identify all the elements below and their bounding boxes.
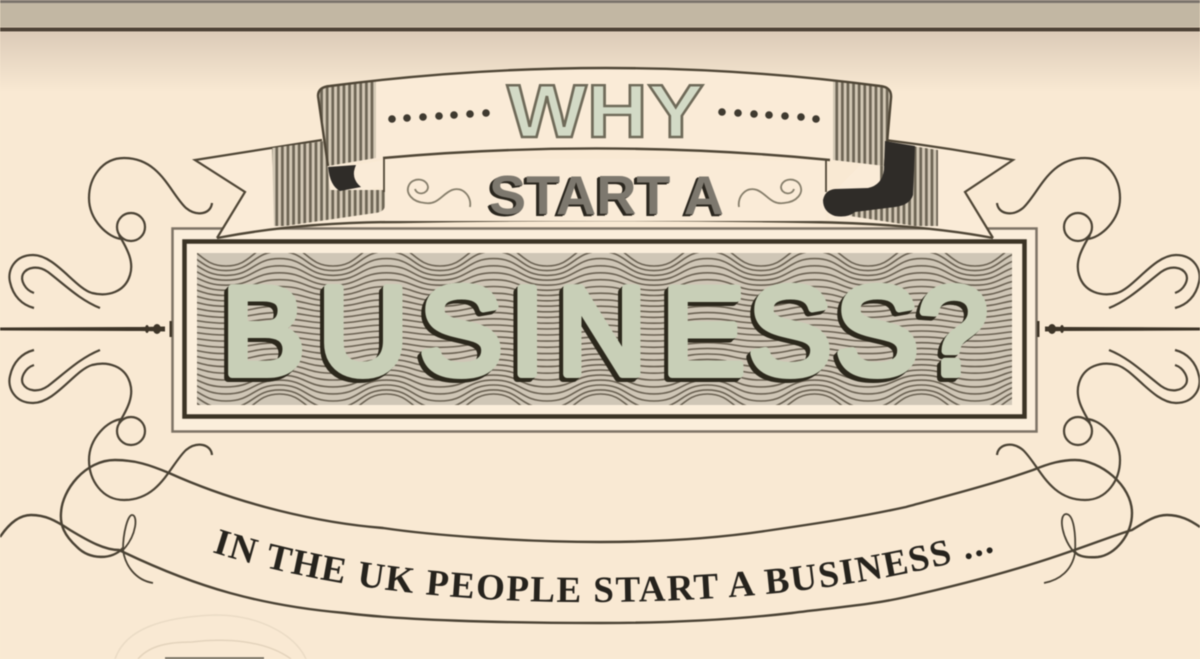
ribbon left tail — [195, 140, 385, 238]
panel: title box with engraved wave fill — [184, 242, 1024, 416]
ribbon: lower curved banner — [0, 460, 1200, 623]
flourish: lower left — [9, 350, 212, 500]
ribbon lower band edge — [217, 220, 993, 238]
icon: right scroll curl — [739, 180, 801, 207]
flourish: upper left — [9, 158, 212, 308]
ribbon upper banner — [318, 68, 891, 221]
banner top edge and end loops — [61, 460, 1132, 557]
dotted rule left — [388, 109, 490, 123]
flourish: upper right — [997, 158, 1200, 308]
centre rule right — [1037, 321, 1200, 337]
dotted rule right — [718, 108, 820, 123]
ribbon: why start a banner — [195, 68, 1013, 238]
icon: left scroll curl — [408, 180, 470, 207]
right small loop — [1044, 514, 1075, 583]
heading: START A: START A — [489, 164, 724, 226]
ribbon right tail — [826, 140, 1013, 238]
left small loop — [123, 515, 153, 583]
panel: outer frame of title box — [172, 228, 1036, 432]
centre rule left — [0, 321, 172, 337]
text: banner caption: IN THE UK PEOPLE START A BUSINESS ... — [212, 528, 994, 604]
heading: WHY: WHY — [507, 69, 704, 153]
heading: BUSINESS?: BUSINESS? — [222, 263, 987, 401]
ribbon left fold — [328, 165, 361, 191]
top band with rule — [0, 0, 1200, 32]
faint emblem at bottom edge — [115, 615, 306, 659]
banner bottom edge — [0, 515, 1200, 623]
flourish: lower right — [997, 350, 1200, 500]
ribbon right fold — [823, 141, 915, 216]
